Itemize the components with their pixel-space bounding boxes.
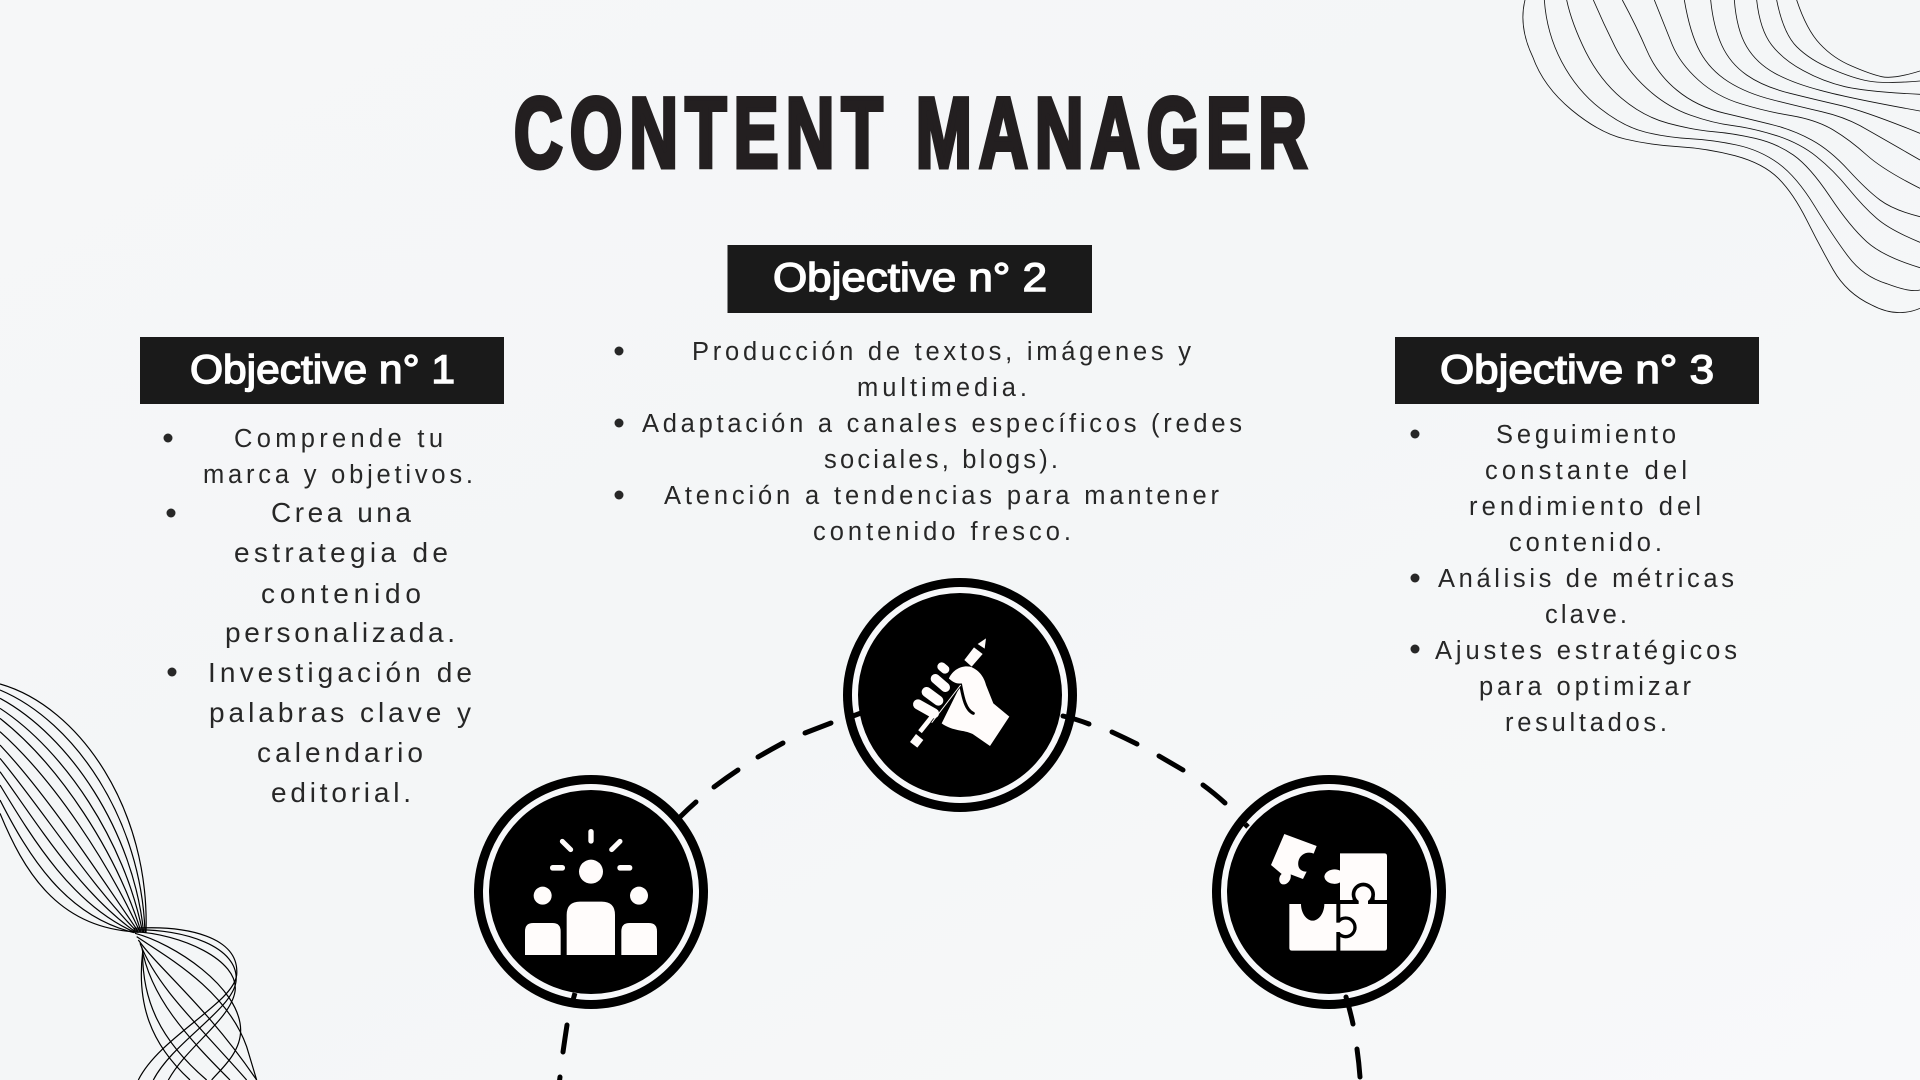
panel: objective 3 [1395, 337, 1759, 737]
text block: objective 1 list: estrategia de [234, 537, 448, 568]
panel: objective 1 [140, 337, 504, 808]
text block: objective 3 list: Ajustes estratégicos [1435, 637, 1737, 665]
heading: objective 2: Objective n° 2 [773, 256, 1047, 300]
panel: objective 2 [614, 245, 1242, 546]
text block: objective 2 list [614, 338, 1242, 546]
text block: objective 1 list: palabras clave y [209, 697, 471, 728]
text block: objective 3 list [1410, 421, 1737, 737]
text block: objective 1 list: contenido [261, 578, 421, 609]
text block: objective 3 list: contenido. [1509, 529, 1662, 557]
heading: objective 3 [1395, 337, 1759, 404]
title: CONTENT MANAGER [514, 77, 1307, 188]
text block: objective 2 list: multimedia. [857, 374, 1027, 402]
text block: objective 2 list: Atención a tendencias para mantener [664, 482, 1220, 510]
text block: objective 2 list: sociales, blogs). [824, 446, 1058, 474]
decorative twisted lines: bottom left [0, 684, 257, 1080]
text block: objective 2 list: Producción de textos, imágenes y [692, 338, 1191, 366]
icon: hand holding pencil badge [843, 578, 1077, 812]
text block: objective 3 list: resultados. [1505, 709, 1667, 737]
text block: objective 3 list: rendimiento del [1469, 493, 1701, 521]
text block: objective 3 list: clave. [1545, 601, 1627, 629]
text block: objective 1 list: calendario [257, 737, 423, 768]
heading: objective 1: Objective n° 1 [190, 348, 455, 392]
text block: objective 1 list [164, 425, 473, 808]
text block: objective 3 list: Análisis de métricas [1438, 565, 1734, 593]
text block: objective 3 list: para optimizar [1479, 673, 1692, 701]
decorative contour lines: top right [1523, 0, 1920, 313]
heading: objective 2 [728, 245, 1092, 313]
dashed connector arc [559, 713, 1360, 1080]
icon: puzzle pieces badge [1212, 775, 1446, 1009]
text block: objective 1 list: personalizada. [225, 617, 455, 648]
text block: objective 1 list: editorial. [271, 777, 411, 808]
text block: objective 3 list: constante del [1485, 457, 1687, 485]
text block: objective 1 list: Investigación de [208, 657, 472, 688]
text block: objective 2 list: contenido fresco. [813, 518, 1071, 546]
icon: people with idea badge [474, 775, 708, 1009]
heading: objective 3: Objective n° 3 [1440, 348, 1714, 392]
text block: objective 1 list: marca y objetivos. [203, 461, 473, 489]
heading: objective 1 [140, 337, 504, 404]
text block: objective 1 list: Comprende tu [234, 425, 443, 453]
text block: objective 2 list: Adaptación a canales específicos (redes [642, 410, 1242, 438]
text block: objective 1 list: Crea una [271, 497, 411, 528]
text block: objective 3 list: Seguimiento [1496, 421, 1676, 449]
